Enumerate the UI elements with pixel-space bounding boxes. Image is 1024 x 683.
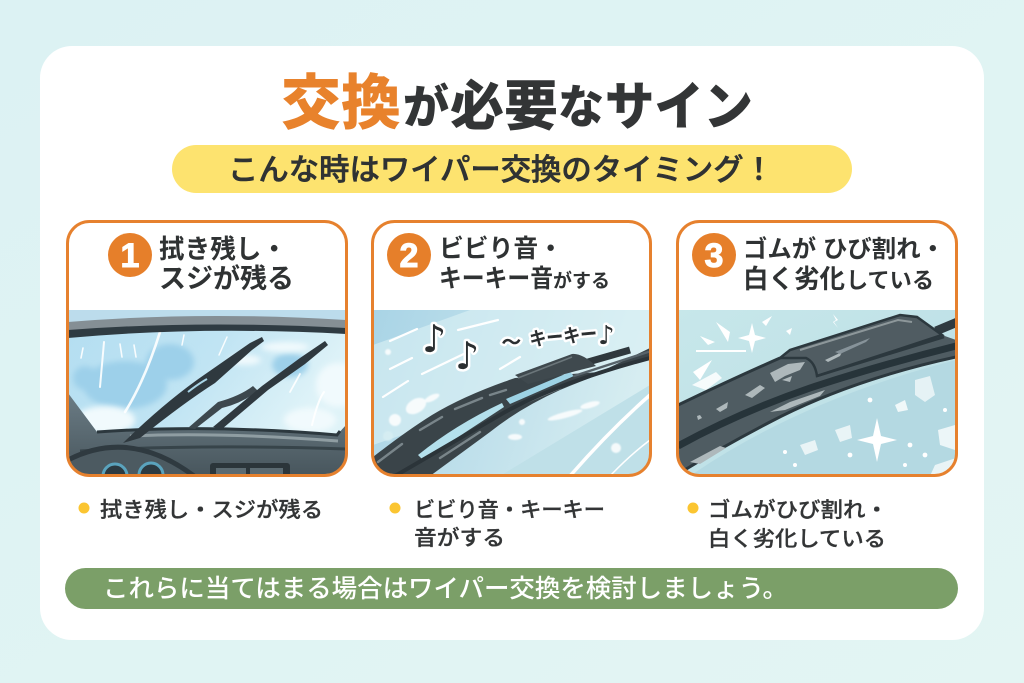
wiper left: [123, 337, 264, 443]
panel 3: cracked rubber: [678, 222, 960, 476]
blade window: [418, 403, 504, 460]
bullet 3: ゴムがひび割れ・: [708, 498, 888, 522]
subtitle banner: [172, 145, 852, 193]
panel 2 heading: [439, 235, 610, 293]
music notes and squeak: 〜: [501, 331, 522, 355]
center vent: [210, 463, 290, 474]
panel 1 heading: 拭き残し・: [159, 234, 287, 264]
blade arm: [588, 350, 630, 362]
number badge 2: [387, 233, 431, 277]
bullet 2: [390, 499, 605, 550]
bullet 2: ビビり音・キーキー: [414, 499, 605, 522]
panel 2 heading: がする: [553, 269, 610, 292]
conclusion banner: これらに当てはまる場合はワイパー交換を検討しましょう。: [103, 575, 788, 603]
panel 1: streaks: [68, 222, 360, 488]
blade body: [373, 348, 650, 476]
number badge 1: 1: [121, 237, 139, 275]
title: [281, 70, 753, 137]
number badge 2: 2: [400, 237, 418, 275]
music notes and squeak: ♪: [455, 334, 479, 378]
number badge 3: 3: [705, 237, 723, 275]
subtitle banner: こんな時はワイパー交換のタイミング！: [228, 154, 774, 187]
lower blade edge: [395, 358, 650, 476]
music notes and squeak: ♪: [598, 321, 615, 351]
title: 必要: [450, 77, 558, 137]
panel 3 heading: 白く劣化: [743, 264, 845, 294]
panel 1 heading: スジが残る: [159, 263, 294, 294]
blade arm: [936, 321, 960, 331]
wiper right: [188, 341, 328, 429]
title: な: [558, 81, 604, 133]
music notes and squeak: ♪: [422, 317, 446, 361]
blade cover: [780, 315, 942, 376]
gauges: [102, 462, 164, 474]
lower rail edge: [678, 357, 956, 474]
blade body: [678, 335, 956, 474]
bullet 3: [688, 498, 888, 551]
bullet 1: 拭き残し・スジが残る: [100, 498, 323, 522]
illustration: deteriorated blade: [678, 310, 960, 476]
bullet 2: 音がする: [414, 527, 505, 550]
panel 2 heading: ビビり音・: [439, 235, 563, 263]
title: が: [403, 81, 449, 133]
number badge 1: [108, 233, 152, 277]
illustration: windshield with streaks: [69, 310, 345, 474]
roof band: [69, 316, 345, 330]
illustration: vibrating wiper blade: [373, 310, 650, 476]
sparkles: [692, 314, 956, 476]
music notes and squeak: キーキー: [529, 324, 598, 351]
panel 3 heading: している: [846, 268, 934, 293]
blade highlights: [378, 352, 648, 462]
conclusion banner: [65, 568, 958, 609]
panel 3 heading: ゴムが ひび割れ・: [743, 235, 945, 263]
title: サイン: [605, 79, 753, 137]
panel 3 heading: [743, 235, 945, 294]
steering wheel: [86, 450, 126, 474]
panel 1 heading: [159, 234, 294, 294]
title: 交換: [281, 70, 401, 137]
bullet 3: 白く劣化している: [708, 528, 886, 551]
windshield glass: [70, 331, 345, 434]
number badge 3: [692, 233, 736, 277]
worn flakes: [690, 338, 870, 464]
panel 2: chatter noise: [372, 222, 650, 476]
music notes and squeak: [422, 322, 615, 372]
dark channel: [678, 346, 956, 446]
panel 2 heading: キーキー音: [439, 265, 553, 293]
dashboard: [68, 393, 346, 476]
blade cover: [515, 354, 596, 378]
